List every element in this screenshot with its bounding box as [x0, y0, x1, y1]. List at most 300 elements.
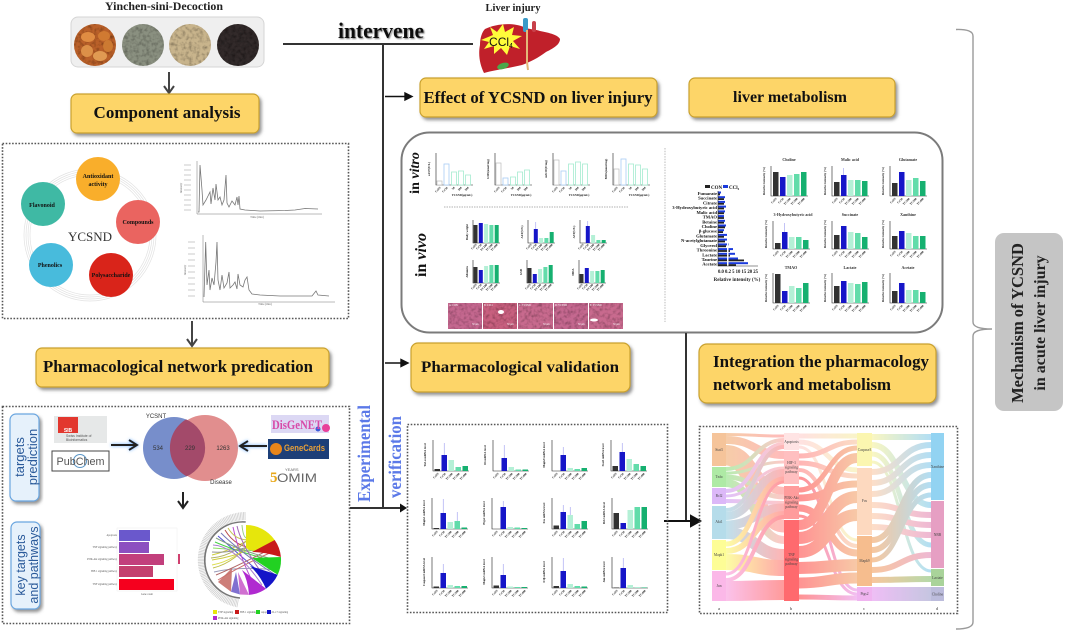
- chart: metabolite relative intensity bars: 3-Hydroxybutyric acid: [672, 205, 717, 210]
- chart: Venn diagram: 534: [153, 446, 164, 452]
- nodes: targets: Fos: [862, 499, 868, 503]
- nodes: metabolites: Lactate: [932, 576, 943, 580]
- label: intervene: intervene: [338, 18, 424, 43]
- nodes: pathways: pathway: [785, 470, 798, 474]
- chart: Fos mRNA: [542, 498, 588, 539]
- labels: sankey columns: d: [936, 606, 939, 611]
- chart: Mapk3 mRNA: CON: [491, 588, 499, 596]
- chart: Glutamate: Glutamate: [899, 157, 917, 162]
- chart: in vivo MDA: [571, 260, 606, 292]
- chart: Acetate: Acetate: [902, 265, 915, 270]
- icon: herb 1: [74, 24, 116, 66]
- label: key targets and pathways: and pathways: [27, 526, 41, 604]
- chart: Il6 mRNA: YC200: [512, 472, 521, 481]
- chart: Choline: CON: [770, 196, 778, 204]
- chart: chromatogram 1: Time (min): [250, 215, 264, 219]
- chart: in vitro MDA: 200: [641, 186, 647, 192]
- logo: PubChem: PubChem: [56, 456, 104, 468]
- chart: Ptgs2 mRNA: Ptgs2 mRNA level: [482, 501, 486, 525]
- chart: chromatogram 2: Time (min): [258, 302, 272, 306]
- chart: in vivo ALT: CCl4: [530, 243, 538, 250]
- label: in vitro: in vitro: [408, 152, 423, 194]
- chart: Jun mRNA: CON: [611, 588, 619, 596]
- chart: metabolite relative intensity bars: Fumarate: [698, 191, 717, 196]
- chart: Fos mRNA: CCl4: [558, 530, 566, 537]
- chart: in vivo albumin: YC200: [485, 283, 494, 292]
- heading box: Integration the pharmacology network and metabolism: Integration the pharmacology: [713, 352, 929, 371]
- chart: metabolite relative intensity bars: Glycerol: [700, 243, 718, 248]
- node: Antioxidant activity: Antioxidant: [83, 174, 113, 180]
- chart: Xanthine: [881, 212, 927, 259]
- chart: Lactate: YC200: [851, 304, 860, 313]
- chart: in vivo AST: CCl4: [582, 243, 590, 250]
- logo: Swiss Institute of Bioinformatics: Bioinformatics: [66, 438, 88, 442]
- chart: metabolite relative intensity bars: Taurine: [702, 257, 717, 262]
- chart: in vivo MDA: CCl4: [581, 283, 589, 290]
- chart: Il6 mRNA: CON: [492, 471, 500, 479]
- chart: Acetate: [881, 265, 927, 313]
- nodes: pathways: Apoptosis: [784, 440, 799, 444]
- chart: Acetate: YC200: [909, 304, 918, 313]
- chart: Jun mRNA: YC100: [624, 589, 633, 598]
- chart: in vitro AST: 50: [451, 186, 456, 191]
- chart: Glutamate: YC400: [916, 197, 925, 206]
- chart: Xanthine: Relative intensity (%): [881, 220, 885, 248]
- chart: Malic acid: YC200: [851, 197, 860, 206]
- heading box: Integration the pharmacology network and metabolism: network and metabolism: [713, 375, 891, 394]
- node: Antioxidant activity: activity: [88, 182, 108, 188]
- chart: in vivo GSH: [519, 260, 554, 292]
- chart: Malic acid: Malic acid: [841, 157, 860, 162]
- chart: Il1b mRNA: CON: [551, 588, 559, 596]
- chart: in vitro AST: YCSND(μg/mL): [452, 193, 472, 197]
- chart: Malic acid: CCl4: [838, 197, 846, 204]
- legend: chord diagram: PI3K-Akt signaling: [218, 617, 239, 620]
- chart: in vitro GSH: 200: [523, 186, 529, 192]
- chart: 3-Hydroxybutyric acid: YC100: [785, 250, 794, 259]
- chart: Bcl2 mRNA: YC100: [624, 530, 633, 539]
- chart: in vitro MDA: CON: [611, 185, 619, 193]
- chart: 3-Hydroxybutyric acid: CCl4: [779, 250, 787, 257]
- callout: Mechanism of YCSND in acute liver injury: Mechanism of YCSND: [1008, 243, 1027, 403]
- chart: Caspase3 mRNA: CCl4: [438, 589, 446, 596]
- icon: liver with CCl4 burst: 4: [509, 43, 513, 50]
- chart: in vivo body weight: [465, 220, 500, 252]
- chart: in vivo albumin: YC400: [490, 283, 499, 292]
- chart: in vitro SOD: CCl4: [558, 186, 566, 193]
- chart: in vitro AST: CON: [434, 185, 442, 193]
- chart: TMAO: YC400: [799, 304, 808, 313]
- logo: DisGeNET: DisGeNET: [272, 417, 322, 432]
- chart: Mapk3 mRNA: CCl4: [498, 589, 506, 596]
- logo: OMIM: [270, 467, 317, 486]
- label: targets prediction: targets: [12, 437, 27, 477]
- chart: Mapk3 mRNA: YC400: [518, 589, 527, 598]
- links: targets to classes: [872, 437, 931, 594]
- chart: Acetate: CON: [889, 303, 897, 311]
- chart: metabolite relative intensity bars: Choline: [702, 224, 717, 229]
- chart: metabolite relative intensity bars: Threonine: [697, 248, 717, 253]
- chart: Il6 mRNA: YC400: [519, 472, 528, 481]
- chart: in vitro AST: [427, 153, 473, 197]
- labels: sankey columns: [718, 606, 939, 611]
- chart: in vivo ALT: CON: [525, 242, 533, 250]
- chart: in vivo GSH: YC400: [544, 283, 553, 292]
- links: pathways to targets: [799, 436, 857, 598]
- chart: Fos mRNA: YC400: [578, 530, 587, 539]
- chart: Mapk9 mRNA: [542, 440, 588, 481]
- chart: Acetate: CCl4: [896, 304, 904, 311]
- chart: pathway enrichment bars: Apoptosis: [106, 534, 117, 537]
- chart: Malic acid: YC100: [844, 197, 853, 206]
- nodes: genes: Bcl2: [716, 494, 723, 498]
- chart: in vitro AST: 100: [457, 186, 463, 192]
- chart: Il1b mRNA: YC200: [571, 589, 580, 598]
- chart: Succinate: Succinate: [842, 212, 858, 217]
- chart: Succinate: CCl4: [838, 250, 846, 257]
- heading box: Component analysis: Component analysis: [94, 103, 241, 122]
- chart: in vitro MDA: MDA(nmol/mg): [604, 159, 608, 179]
- chart: Il1b mRNA: CCl4: [558, 589, 566, 596]
- chart: Bcl2 mRNA: YC200: [631, 530, 640, 539]
- chart: Ptgs2 mRNA: YC400: [518, 530, 527, 539]
- chart: Xanthine: YC100: [902, 250, 911, 259]
- chart: pathway enrichment bars: PI3K-Akt signaling pathway: [87, 558, 118, 561]
- nodes: targets: [857, 433, 872, 601]
- chart: Choline: Choline: [782, 157, 796, 162]
- links: genes to pathways: [726, 434, 784, 591]
- chart: in vivo body weight: Body weight: [465, 224, 469, 240]
- chart: metabolite relative intensity bars: 0.0 0.2 5 10 15 20 25: [718, 270, 758, 275]
- chart: Tnf mRNA: CCl4: [439, 472, 447, 479]
- chart: TMAO: YC100: [785, 304, 794, 313]
- chart: metabolite relative intensity bars: [672, 185, 761, 283]
- nodes: targets: Caspase3: [858, 448, 871, 452]
- logo: OMIM: YEARS: [285, 467, 299, 472]
- chart: Il6 mRNA: [483, 440, 529, 481]
- image: liver histology strip: E: YCSND: [590, 304, 602, 307]
- chart: Lactate: [823, 265, 869, 313]
- nodes: metabolites: NBB: [934, 533, 942, 537]
- chart: metabolite relative intensity bars: Malic acid: [696, 210, 717, 215]
- arrow: Venn to key targets: [178, 492, 188, 508]
- chart: in vivo ALT: [520, 220, 555, 252]
- image: liver histology strip: C: YCSND: [519, 304, 531, 307]
- chart: metabolite relative intensity bars: Betaine: [702, 219, 717, 224]
- chart: in vivo GSH: YC100: [533, 283, 543, 292]
- chart: in vivo MDA: YC400: [596, 283, 605, 292]
- chart: in vivo GSH: CCl4: [529, 283, 537, 290]
- nodes: genes: Tnfα: [715, 475, 723, 479]
- chart: in vivo ALT: YC100: [534, 243, 544, 252]
- chart: Mapk1 mRNA: CON: [431, 529, 439, 537]
- chart: Stat3 mRNA: CON: [610, 471, 618, 479]
- chart: Mapk3 mRNA: Mapk3 mRNA level: [482, 559, 486, 585]
- chart: Ptgs2 mRNA: [482, 498, 528, 539]
- chart: Xanthine: YC400: [916, 250, 925, 259]
- chart: in vitro MDA: CCl4: [618, 186, 626, 193]
- chart: Il6 mRNA: YC100: [505, 472, 514, 481]
- chart: Caspase3 mRNA: CON: [431, 588, 439, 596]
- chart: in vivo MDA: YC200: [591, 283, 600, 292]
- logo: GeneCards: [268, 439, 329, 459]
- node: Compounds: Compounds: [122, 220, 154, 226]
- arrow: databases to Venn: [111, 440, 137, 450]
- label: Experimental verification: Experimental: [354, 405, 374, 502]
- ring diagram: YCSND components: [21, 157, 160, 301]
- chart: Tnf mRNA: YC400: [459, 472, 468, 481]
- arrow: to network prediction: [187, 321, 197, 346]
- chart: Mapk1 mRNA: Mapk1 mRNA level: [422, 500, 426, 526]
- chart: in vitro SOD: CON: [551, 185, 559, 193]
- chart: Venn diagram: YCSNT: [146, 414, 166, 420]
- label: Experimental verification: verification: [385, 416, 405, 498]
- heading box: Integration the pharmacology network and metabolism: [699, 344, 936, 403]
- logo: GeneCards: GeneCards: [284, 443, 325, 453]
- icon: liver with CCl4 burst: CCl: [489, 35, 509, 49]
- labels: sankey columns: b: [790, 606, 793, 611]
- label: Experimental verification: [354, 405, 405, 502]
- chart: in vitro GSH: GSH(nmol/mg): [486, 159, 490, 179]
- chart: Mapk9 mRNA: CON: [551, 471, 559, 479]
- chart: Il1b mRNA: YC400: [578, 589, 587, 598]
- chart: Mapk3 mRNA: YC200: [511, 589, 520, 598]
- chart: Mapk3 mRNA: YC100: [504, 589, 513, 598]
- heading box: Pharmacological network predication: [36, 348, 329, 387]
- chart: Stat3 mRNA: YC400: [637, 472, 646, 481]
- node: Polysaccharide: [89, 253, 133, 297]
- chart: metabolite relative intensity bars: TMAO: [703, 215, 717, 220]
- chart: 3-Hydroxybutyric acid: YC400: [799, 250, 808, 259]
- image: liver histology strip: 50 μm: [543, 323, 550, 326]
- chart: in vitro AST: CCl4: [441, 186, 449, 193]
- arrow head: verification: [400, 504, 407, 512]
- nodes: metabolites: Xanthine: [931, 465, 944, 469]
- nodes: pathways: TNF: [788, 553, 795, 557]
- chart: Glutamate: YC100: [902, 197, 911, 206]
- chart: Venn diagram: Disease: [210, 480, 232, 486]
- chart: in vivo AST: YC400: [597, 243, 606, 252]
- chart: metabolite relative intensity bars: Citrate: [703, 200, 717, 205]
- chart: in vivo AST: [572, 220, 607, 252]
- nodes: targets: Ptgs2: [860, 592, 869, 596]
- chart: Glutamate: YC200: [909, 197, 918, 206]
- chart: Ptgs2 mRNA: YC100: [504, 530, 513, 539]
- chart: Jun mRNA: YC200: [631, 589, 640, 598]
- chart: Venn diagram: [143, 414, 238, 486]
- callout: Mechanism of YCSND in acute liver injury: [995, 233, 1063, 411]
- label: key targets and pathways: [11, 522, 41, 609]
- heading box: Pharmacological validation: Pharmacological validation: [421, 359, 619, 376]
- chart: in vitro SOD: 50: [568, 186, 573, 191]
- image: liver histology strip: D: YCSND: [555, 304, 567, 307]
- label: in vivo: in vivo: [413, 233, 430, 277]
- nodes: pathways: signaling: [785, 558, 798, 562]
- chart: Jun mRNA: Jun mRNA level: [602, 561, 606, 582]
- connector: intervene line and trunk: [283, 44, 473, 509]
- chart: TMAO: [764, 265, 810, 313]
- chart: Mapk1 mRNA: YC100: [444, 530, 453, 539]
- chart: Mapk9 mRNA: YC200: [571, 472, 580, 481]
- chart: Ptgs2 mRNA: YC200: [511, 530, 520, 539]
- nodes: pathways: signaling: [785, 466, 798, 470]
- chart: Choline: Relative intensity (%): [762, 167, 766, 195]
- chart: Caspase3 mRNA: [422, 557, 468, 598]
- chart: 3-Hydroxybutyric acid: Relative intensity (%): [764, 220, 768, 248]
- chart: Glutamate: Relative intensity (%): [881, 167, 885, 195]
- callout: Mechanism of YCSND in acute liver injury: in acute liver injury: [1032, 255, 1049, 391]
- panel: mRNA expression charts: [408, 424, 668, 612]
- chart: 3-Hydroxybutyric acid: YC200: [792, 250, 801, 259]
- chart: Caspase3 mRNA: Caspase3 mRNA level: [422, 558, 426, 586]
- legend: chord diagram: [213, 610, 289, 620]
- chart: Tnf mRNA: [423, 440, 469, 481]
- chart: Lactate: Relative intensity (%): [823, 274, 827, 302]
- chart: in vivo AST: YC200: [592, 243, 601, 252]
- chart: 3-Hydroxybutyric acid: [764, 212, 813, 259]
- chart: Bcl2 mRNA: CON: [611, 529, 619, 537]
- chart: Succinate: YC200: [851, 250, 860, 259]
- chart: Il6 mRNA: CCl4: [499, 472, 507, 479]
- chart: Stat3 mRNA: [601, 440, 647, 481]
- chart: in vitro SOD: 200: [581, 186, 587, 192]
- chart: Ptgs2 mRNA: CON: [491, 529, 499, 537]
- chart: metabolite relative intensity bars: Relative intensity (%): [714, 278, 761, 283]
- logo: Swiss Institute of Bioinformatics: SIB: [64, 428, 73, 434]
- logo: Swiss Institute of Bioinformatics: [54, 416, 107, 443]
- nodes: genes: Stat3: [715, 448, 723, 452]
- node: Compounds: [116, 200, 160, 244]
- heading box: Effect of YCSND on liver injury: Effect of YCSND on liver injury: [424, 88, 653, 107]
- chart: Malic acid: CON: [831, 196, 839, 204]
- arrow: to pharmacological validation: [385, 360, 408, 366]
- legend: chord diagram: HIF-1 signaling: [240, 611, 257, 614]
- chart: Acetate: Relative intensity (%): [881, 274, 885, 302]
- chart: in vivo AST: YC100: [586, 243, 596, 252]
- chart: in vivo body weight: CCl4: [475, 243, 483, 250]
- brace: right bracket: [956, 29, 992, 629]
- chart: in vivo ALT: ALT(U/L): [520, 226, 524, 238]
- image: liver histology strip: 50 μm: [578, 323, 585, 326]
- chart: metabolite relative intensity bars: Acetate: [702, 262, 717, 267]
- legend: CON vs CCl4: CCl₄: [729, 186, 740, 191]
- nodes: metabolites: Choline: [932, 592, 944, 596]
- chart: metabolite relative intensity bars: N-acetylglutamate: [681, 238, 717, 243]
- chart: Mapk3 mRNA: [482, 557, 528, 598]
- chart: in vivo body weight: YC400: [490, 243, 499, 252]
- chart: Glutamate: CON: [889, 196, 897, 204]
- chart: Lactate: CON: [831, 303, 839, 311]
- chart: Caspase3 mRNA: YC200: [451, 589, 460, 598]
- chart: Mapk1 mRNA: YC200: [451, 530, 460, 539]
- chart: Il1b mRNA: [542, 557, 588, 598]
- chart: in vivo albumin: [465, 260, 500, 292]
- nodes: genes: Mapk1: [714, 553, 724, 557]
- chart: Choline: YC400: [797, 197, 806, 206]
- chart: Mapk9 mRNA: YC100: [564, 472, 573, 481]
- node: Phenolics: [29, 243, 73, 287]
- chart: Malic acid: [823, 157, 869, 206]
- node: Polysaccharide: Polysaccharide: [92, 273, 131, 279]
- labels: sankey columns: a: [718, 606, 720, 611]
- chart: Succinate: Relative intensity (%): [823, 220, 827, 248]
- chart: Malic acid: Relative intensity (%): [823, 167, 827, 195]
- node: Antioxidant activity: [76, 157, 120, 201]
- chart: in vivo MDA: YC100: [585, 283, 595, 292]
- chart: pathway enrichment bars: TNF signaling pathway: [92, 546, 118, 549]
- chart: TMAO: CON: [772, 303, 780, 311]
- nodes: pathways: pathway: [785, 562, 798, 566]
- chart: in vivo GSH: GSH: [519, 268, 523, 275]
- chart: Xanthine: CON: [889, 249, 897, 257]
- chart: Fos mRNA: YC200: [571, 530, 580, 539]
- chart: chromatogram 1: [179, 161, 322, 219]
- chart: Il1b mRNA: Il1β mRNA level: [542, 561, 546, 583]
- chart: in vitro SOD: mSOD(U/mg): [544, 160, 548, 178]
- chart: Lactate: YC400: [858, 304, 867, 313]
- chart: in vitro SOD: [544, 153, 590, 197]
- chart: Jun mRNA: YC400: [638, 589, 647, 598]
- chart: Fos mRNA: CON: [551, 529, 559, 537]
- chart: Ptgs2 mRNA: CCl4: [498, 530, 506, 537]
- chart: Bcl2 mRNA: YC400: [638, 530, 647, 539]
- chart: Xanthine: YC200: [909, 250, 918, 259]
- chart: in vivo ALT: YC400: [545, 243, 554, 252]
- chart: in vitro MDA: 100: [634, 186, 640, 192]
- legend: chord diagram: IL-17 signaling: [272, 611, 289, 614]
- icon: herb 3: [169, 24, 211, 66]
- chart: Acetate: YC100: [902, 304, 911, 313]
- arrow: GeneCards to Venn: [240, 441, 267, 451]
- legend: CON vs CCl4: CON: [711, 186, 722, 191]
- image: liver histology strip: 50 μm: [507, 323, 514, 326]
- logo: OMIM: 5: [270, 470, 278, 486]
- chart: Glutamate: CCl4: [896, 197, 904, 204]
- chart: in vitro GSH: [486, 153, 532, 197]
- chart: in vitro MDA: [604, 153, 650, 197]
- node: Phenolics: Phenolics: [38, 263, 63, 269]
- chart: in vitro MDA: YCSND(μg/mL): [629, 193, 649, 197]
- chart: GO chord diagram: [202, 516, 281, 603]
- chart: in vivo AST: CON: [577, 242, 585, 250]
- nodes: genes: [712, 433, 726, 601]
- arrow: to component analysis: [164, 72, 174, 93]
- chart: Choline: [762, 157, 808, 206]
- chart: Tnf mRNA: YC200: [452, 472, 461, 481]
- chart: TMAO: Relative intensity (%): [764, 274, 768, 302]
- panel: experimental results: [402, 132, 942, 332]
- chart: Succinate: [823, 212, 869, 259]
- chart: in vitro GSH: 100: [516, 186, 522, 192]
- panel: herb photos: [71, 17, 264, 67]
- arrow: into experimental verification: [350, 507, 400, 509]
- image: liver histology strip: 50 μm: [472, 323, 479, 326]
- chart: Succinate: YC100: [844, 250, 853, 259]
- chart: in vivo MDA: MDA: [571, 268, 575, 276]
- chart: Acetate: YC400: [916, 304, 925, 313]
- chart: in vitro GSH: CON: [493, 185, 501, 193]
- chart: in vivo body weight: YC200: [485, 243, 494, 252]
- chart: Jun mRNA: [602, 557, 648, 598]
- chart: metabolite relative intensity bars: Glutamate: [696, 233, 717, 238]
- chart: Mapk9 mRNA: YC400: [578, 472, 587, 481]
- chart: Malic acid: YC400: [858, 197, 867, 206]
- chart: in vivo albumin: Albumin: [465, 266, 469, 278]
- chart: Xanthine: Xanthine: [900, 212, 916, 217]
- chart: in vitro GSH: CCl4: [500, 186, 508, 193]
- chart: Mapk1 mRNA: CCl4: [438, 530, 446, 537]
- nodes: metabolites: [931, 433, 944, 601]
